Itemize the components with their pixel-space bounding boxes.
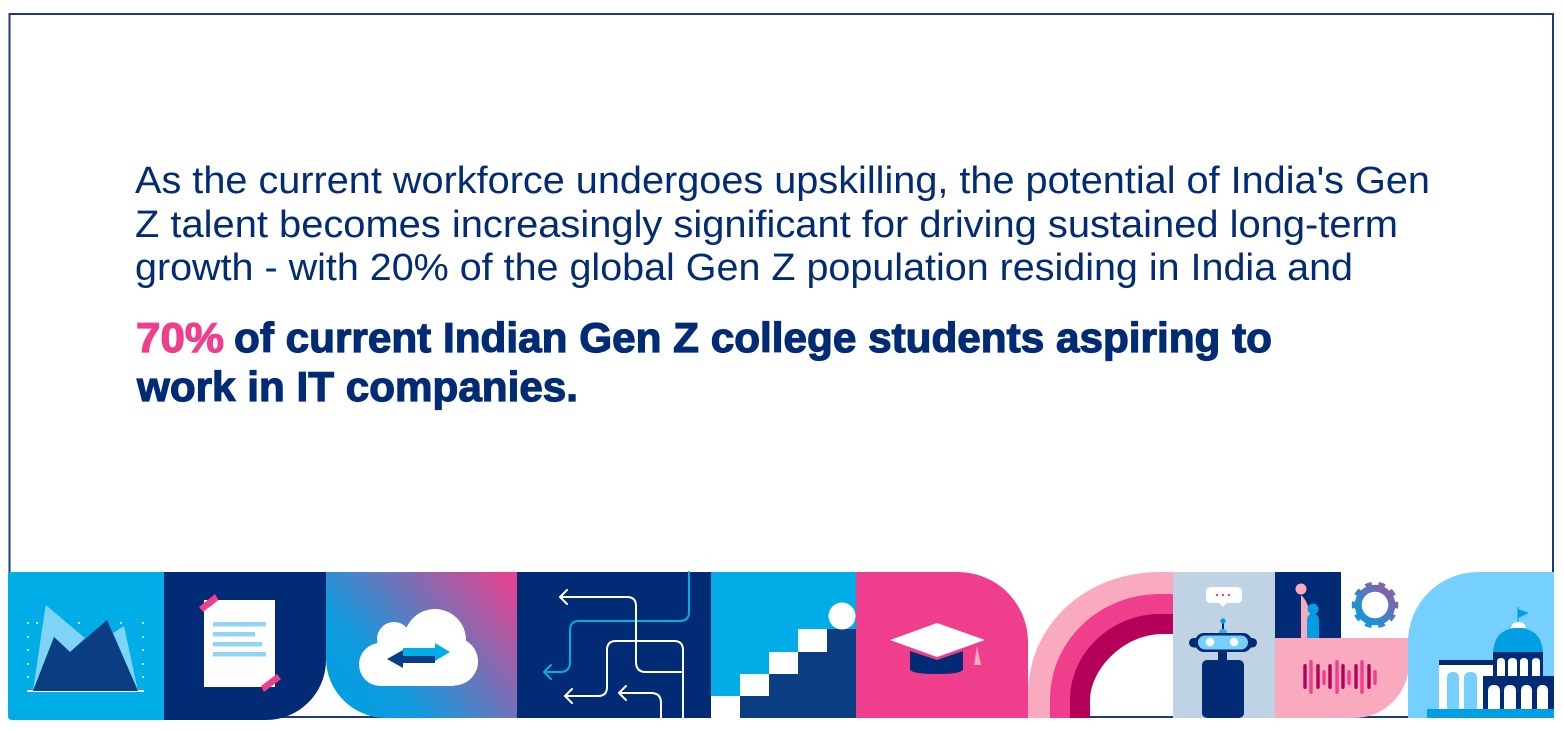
panel: graduation cap <box>856 572 1028 718</box>
panel: rainbow arches <box>1028 572 1173 718</box>
main paragraph: As the current workforce undergoes upskilling, the potential of India's Gen <box>135 160 1430 202</box>
icon: gear <box>1354 584 1396 626</box>
highlighted statistic: 70% <box>136 314 224 361</box>
panel: network arrows <box>517 572 711 718</box>
main paragraph <box>135 160 1430 289</box>
highlighted statistic: work in IT companies. <box>136 363 578 410</box>
panel: stairs <box>711 572 856 718</box>
main paragraph: Z talent becomes increasingly significant for driving sustained long-term <box>135 204 1398 246</box>
highlighted statistic <box>136 314 1272 410</box>
panel: people <box>1275 572 1341 638</box>
main paragraph: growth - with 20% of the global Gen Z population residing in India and <box>135 247 1353 289</box>
panel: document <box>164 572 326 720</box>
panel: mountain chart <box>8 572 164 720</box>
panel: cloud transfer <box>326 572 517 718</box>
panel: robot <box>1173 572 1275 718</box>
panel: government building <box>1408 572 1554 718</box>
highlighted statistic: of current Indian Gen Z college students aspiring to <box>234 314 1272 361</box>
panel: sound wave <box>1275 638 1409 718</box>
